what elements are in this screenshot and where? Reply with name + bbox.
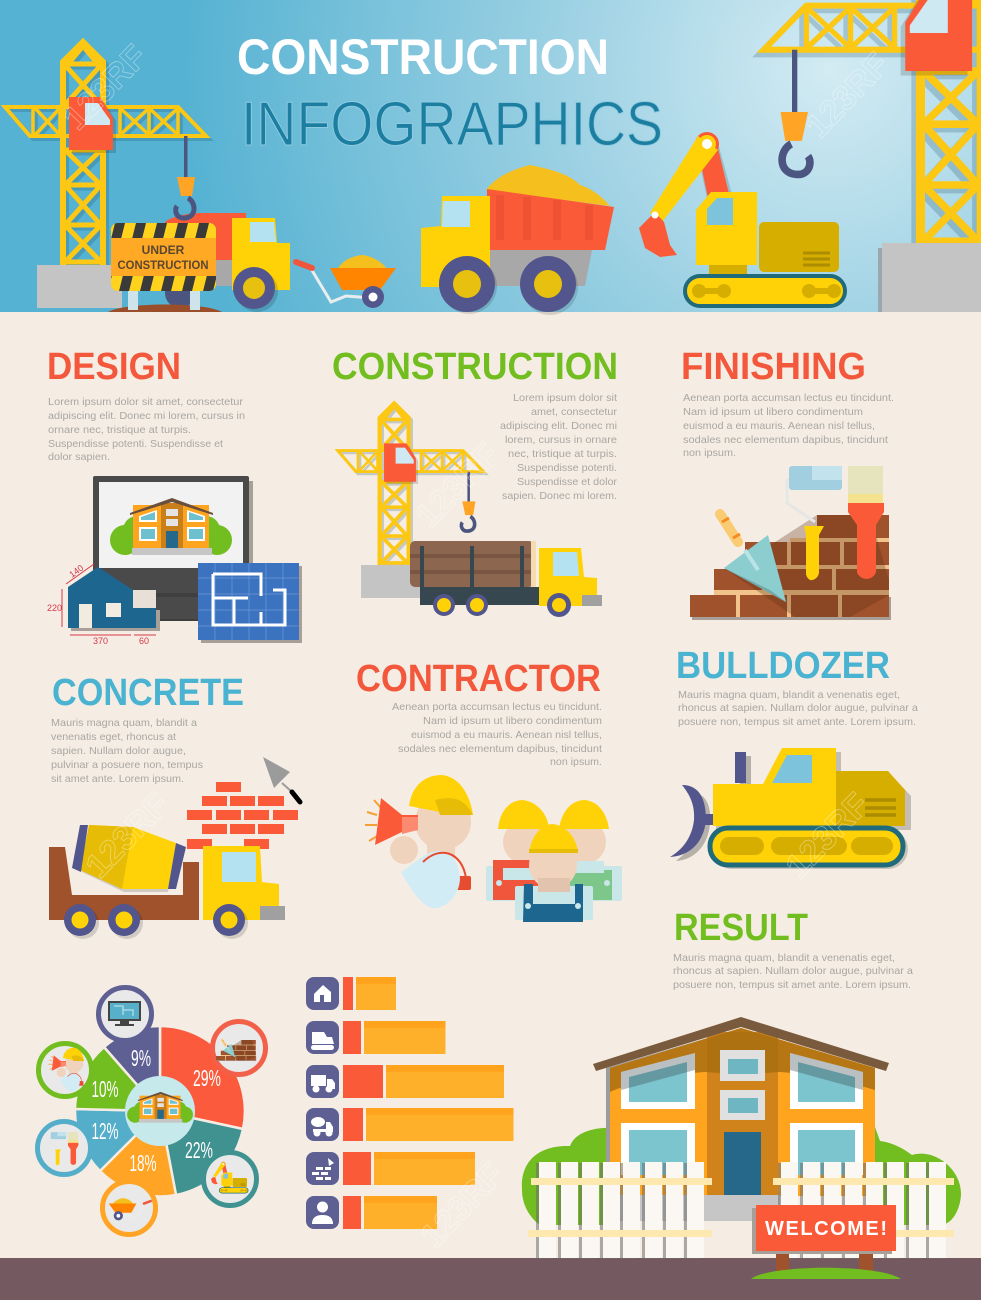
icon circle: design xyxy=(98,988,152,1040)
watermark overlay: 123RF xyxy=(56,38,155,138)
bushes xyxy=(522,1127,961,1225)
fence left xyxy=(528,1162,712,1259)
section: bulldozer xyxy=(670,645,918,869)
title: CONSTRUCTION xyxy=(237,29,609,85)
percentage labels: 9% xyxy=(131,1045,151,1071)
icon: contractor with megaphone xyxy=(365,775,473,908)
section: design xyxy=(47,346,302,646)
house body xyxy=(593,1017,889,1221)
text block: result: Mauris magna quam, blandit a venenatis eget, xyxy=(673,952,895,964)
title: INFOGRAPHICS xyxy=(241,90,663,159)
sign: under construction: UNDER xyxy=(142,243,185,257)
icon circle: wheelbarrow xyxy=(102,1182,156,1234)
watermark overlay: 123RF xyxy=(413,1156,512,1256)
text block: finishing: euismod a eu mauris. Aenean nisl tellus, xyxy=(683,420,875,432)
section: concrete xyxy=(49,672,300,939)
pie slices xyxy=(75,1026,245,1196)
bar row 5: bricks xyxy=(306,1152,475,1185)
text block: bulldozer: posuere non, tempus sit amet ante. Lorem ipsum. xyxy=(678,716,916,728)
blue house with dimensions: 220 xyxy=(47,603,62,613)
percentage labels: 22% xyxy=(185,1137,213,1163)
text block: construction: sapien. Donec mi lorem. xyxy=(502,490,617,502)
text block: construction: Suspendisse potenti. xyxy=(517,462,617,474)
crane base left xyxy=(37,265,122,308)
sign: under construction: CONSTRUCTION xyxy=(118,258,208,272)
blue house with dimensions: 370 xyxy=(93,636,108,646)
text block: design: Lorem ipsum dolor sit amet, consectetur xyxy=(48,396,244,408)
watermark overlay: 123RF xyxy=(798,46,897,146)
icon: crane and log truck xyxy=(338,403,602,617)
text block: construction: Suspendisse et dolor xyxy=(517,476,617,488)
icon: bulldozer xyxy=(670,748,911,869)
text block: finishing: sodales nec elementum dapibus, tincidunt xyxy=(683,434,888,446)
watermark overlay: 123RF xyxy=(78,786,177,886)
windows xyxy=(621,1053,695,1109)
heading: bulldozer: BULLDOZER xyxy=(676,645,890,687)
percentage labels: 18% xyxy=(130,1150,156,1176)
heading: contractor: CONTRACTOR xyxy=(356,658,601,700)
sign: welcome xyxy=(751,1205,901,1279)
watermark overlay: 123RF xyxy=(778,786,877,886)
text block: bulldozer xyxy=(678,689,918,728)
percentage labels: 12% xyxy=(92,1118,118,1144)
text block: contractor: Aenean porta accumsan lectus eu tincidunt. xyxy=(392,701,602,713)
percentage labels: 29% xyxy=(193,1065,221,1091)
text block: contractor: non ipsum. xyxy=(550,756,602,768)
blueprint xyxy=(198,563,302,643)
title xyxy=(237,29,663,159)
text block: bulldozer: Mauris magna quam, blandit a venenatis eget, xyxy=(678,689,900,701)
crane base right xyxy=(878,243,981,312)
icon circle: paint tools xyxy=(38,1122,90,1174)
text block: concrete: Mauris magna quam, blandit a xyxy=(51,717,197,729)
worker left xyxy=(486,800,556,901)
icon circle: contractor xyxy=(38,1044,92,1096)
center circle with house xyxy=(125,1076,195,1146)
percentage labels xyxy=(92,1045,221,1176)
text block: finishing: Aenean porta accumsan lectus eu tincidunt. xyxy=(683,392,894,404)
section: construction xyxy=(332,346,618,617)
icon circle: excavator xyxy=(204,1152,256,1206)
text block: result: rhoncus at sapien. Nullam dolor augue, pulvinar a xyxy=(673,965,913,977)
text block: design xyxy=(48,396,245,463)
text block: design: dolor sapien. xyxy=(48,451,110,463)
watermark overlay: 123RF xyxy=(408,436,507,536)
heading: finishing: FINISHING xyxy=(681,346,866,388)
text block: contractor xyxy=(392,701,602,768)
text block: bulldozer: rhoncus at sapien. Nullam dolor augue, pulvinar a xyxy=(678,702,918,714)
text block: construction: lorem, cursus in ornare xyxy=(505,434,617,446)
illustration: result house xyxy=(522,1017,961,1279)
text block: result xyxy=(673,952,913,991)
text block: concrete xyxy=(51,717,203,785)
text block: finishing: Nam id ipsum ut libero condimentum xyxy=(683,406,863,418)
bar row 4: mixer xyxy=(306,1108,514,1141)
text block: construction: nec, tristique at turpis. xyxy=(508,448,617,460)
worker front xyxy=(515,824,593,922)
text block: concrete: sapien. Nullam dolor augue, xyxy=(51,745,186,757)
icon circle: finishing xyxy=(212,1022,266,1074)
text block: contractor: euismod a eu mauris. Aenean nisl tellus, xyxy=(411,729,602,741)
chart: horizontal bars xyxy=(306,977,514,1229)
blue house with dimensions: 60 xyxy=(139,636,149,646)
text block: construction: adipiscing elit. Donec mi xyxy=(500,420,617,432)
text block: construction: amet, consectetur xyxy=(531,406,618,418)
text block: construction xyxy=(500,392,618,502)
icon: brick wall and tools xyxy=(690,466,891,620)
icon: concrete mixer truck xyxy=(49,825,285,939)
bar row 3: truck xyxy=(306,1065,504,1098)
dump truck big xyxy=(421,165,614,315)
excavator xyxy=(639,132,845,306)
icon: bricks and trowel xyxy=(187,757,300,849)
bar row 1: house xyxy=(306,977,396,1010)
ground xyxy=(0,1258,981,1300)
text block: concrete: sit amet ante. Lorem ipsum. xyxy=(51,773,184,785)
tower crane right xyxy=(759,0,981,250)
bar row 2: bulldozer xyxy=(306,1021,446,1054)
section: contractor xyxy=(356,658,622,922)
tower crane left xyxy=(5,42,209,268)
text block: design: ornare nec, tristique at turpis. xyxy=(48,424,191,436)
icon: computer with house and blueprint xyxy=(47,476,302,646)
sign: under construction xyxy=(111,223,216,310)
text block: design: Suspendisse potenti. Suspendisse et xyxy=(48,438,223,450)
section: result xyxy=(673,907,913,991)
percentage labels: 10% xyxy=(92,1076,118,1102)
heading: result: RESULT xyxy=(674,907,808,949)
heading: design: DESIGN xyxy=(47,346,181,388)
bar row 6: worker xyxy=(306,1196,437,1229)
worker right xyxy=(559,800,622,901)
heading: construction: CONSTRUCTION xyxy=(332,346,618,388)
text block: finishing xyxy=(683,392,894,459)
text block: construction: Lorem ipsum dolor sit xyxy=(513,392,617,404)
text block: design: adipiscing elit. Donec mi lorem, cursus in xyxy=(48,410,245,422)
blue house with dimensions xyxy=(47,563,160,646)
sign: welcome: WELCOME! xyxy=(765,1218,887,1240)
chart: segmented pie xyxy=(38,988,266,1234)
icon: workers group xyxy=(486,800,622,922)
text block: concrete: venenatis eget, rhoncus at xyxy=(51,731,176,743)
wheelbarrow xyxy=(296,255,396,308)
text block: contractor: sodales nec elementum dapibus, tincidunt xyxy=(398,743,602,755)
dirt mound xyxy=(108,304,222,312)
text block: finishing: non ipsum. xyxy=(683,447,736,459)
dump truck small xyxy=(165,213,290,312)
text block: concrete: pulvinar a posuere non, tempus xyxy=(51,759,203,771)
heading: concrete: CONCRETE xyxy=(52,672,244,714)
section: finishing xyxy=(681,346,894,620)
text block: result: posuere non, tempus sit amet ante. Lorem ipsum. xyxy=(673,979,911,991)
blue house with dimensions: 140 xyxy=(67,563,85,580)
text block: contractor: Nam id ipsum ut libero condimentum xyxy=(423,715,602,727)
fence right xyxy=(773,1162,954,1259)
mini house xyxy=(110,498,232,555)
panel: header banner xyxy=(0,0,981,315)
